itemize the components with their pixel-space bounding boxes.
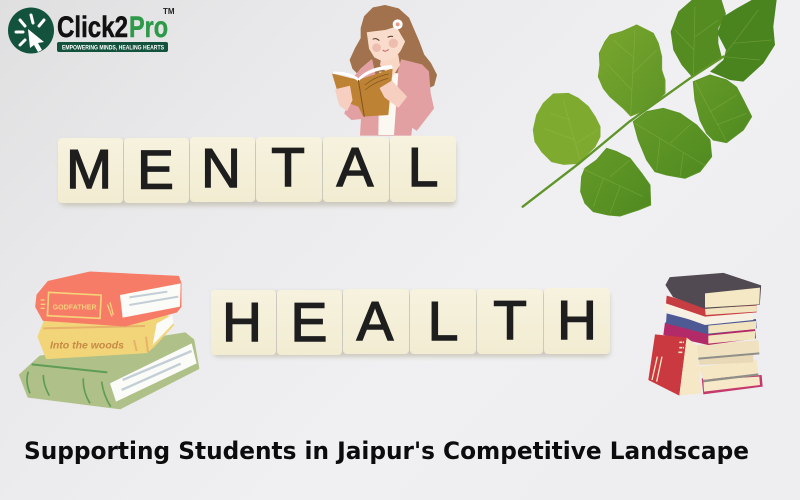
tile A [343,289,409,354]
illustration: girl reading a book [332,6,436,135]
dark top book [666,273,761,308]
tile L: L [428,290,458,352]
standing red book [648,334,702,396]
face [368,26,404,61]
tile A [323,136,389,202]
leaf right lower [693,75,752,143]
leaf top [671,0,726,77]
neck [380,55,400,78]
illustration: green leaf branch [523,0,777,216]
subtitle: Supporting Students in Jaipur's Competitive Landscape [24,437,749,465]
logo wordmark: Click2 [57,11,128,44]
leaf top center [598,25,665,116]
logo tagline [57,42,168,52]
leaf top right [710,0,777,82]
word tiles: HEALTH [211,288,610,357]
magenta book [663,322,756,345]
leaf bottom [581,148,651,216]
tile L: L [408,136,438,198]
illustration: pastel book stack [20,272,198,408]
white top [378,72,398,135]
tile H [544,288,610,354]
tile L [410,289,476,354]
tile M [58,138,123,203]
tile M: M [66,138,112,200]
green book [20,333,198,408]
tile E [277,290,342,355]
hands [336,87,352,110]
tile E: E [291,291,327,353]
tile A: A [357,290,394,352]
white book [663,303,753,325]
bottom pink book [702,375,763,394]
book [332,65,393,117]
logo: Click2Pro: Pro [129,11,168,44]
red book [666,296,757,317]
leaf center lower [633,108,712,178]
yellow book: Into the woods [50,340,124,351]
tile T [256,136,322,202]
tile L [390,136,456,202]
tile N [190,137,255,202]
stem [523,57,723,207]
veins [543,7,772,213]
blue book [666,313,757,334]
flower [393,19,403,29]
logo: Click2Pro [8,7,175,54]
hair [351,6,436,88]
tile T: T [493,289,527,351]
tile E: E [137,138,174,200]
logo icon: cursor badge [8,8,54,54]
cardigan [345,60,433,135]
tile E [124,138,189,203]
tile H [211,290,276,355]
illustration: tall book stack [648,273,763,396]
yellow book [38,315,173,358]
word tiles: MENTAL [58,136,456,206]
red book [36,272,181,326]
tile H: H [222,291,262,353]
tile N: N [201,137,241,199]
cream books [698,360,758,380]
tile A: A [337,136,374,198]
fringe [366,14,396,32]
trademark: TM [163,7,175,16]
tile T [477,289,543,354]
tile H: H [557,289,597,351]
tile T: T [271,136,305,198]
red book: GODFATHER [53,302,97,311]
logo tagline: EMPOWERING MINDS, HEALING HEARTS [62,46,164,52]
leaf left [533,93,600,164]
